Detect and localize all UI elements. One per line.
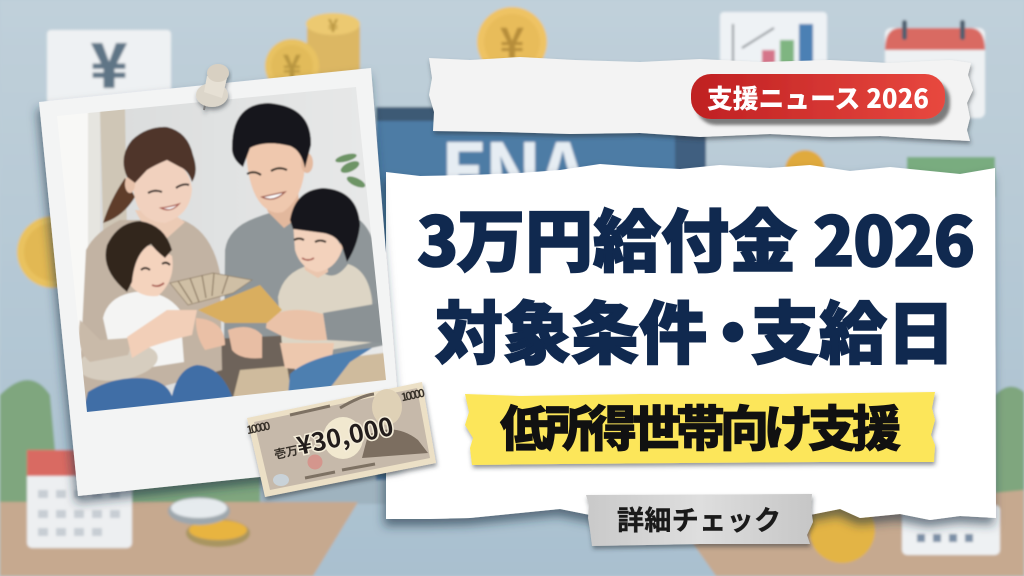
note labels: 10000: [400, 385, 426, 405]
monitor: [376, 107, 706, 480]
room: [100, 87, 383, 396]
cash fan: [170, 273, 252, 305]
envelope: [198, 285, 282, 323]
title: 2026: [813, 187, 975, 286]
coin stack and coins: ¥: [500, 10, 525, 71]
note labels: ¥30,000: [293, 407, 396, 463]
watermark oval: [273, 474, 289, 486]
woman: [78, 127, 222, 410]
torn strip: [429, 57, 973, 141]
grey shelf strip: [260, 478, 386, 504]
title: 3: [417, 187, 458, 286]
woman's arm and hands: [79, 310, 225, 362]
sofa shadow: [215, 335, 296, 396]
torn paper strip with news badge: [429, 57, 973, 141]
boy: [278, 188, 374, 396]
paper sheet: [386, 164, 996, 520]
man's other hand: [228, 327, 262, 358]
portrait: [323, 389, 428, 459]
monitor: ENA: [440, 111, 589, 223]
green banknote card: [907, 157, 995, 197]
girl: [76, 221, 232, 416]
badge: 支援ニュース 2026: 支援ニュース 2026: [707, 79, 929, 116]
polaroid family photo: [39, 64, 403, 496]
note labels: [245, 385, 434, 472]
title: 対象条件: [435, 279, 707, 378]
man's pants: [233, 352, 392, 398]
grey tag: 詳細チェック: [586, 494, 813, 546]
desk surfaces: [0, 490, 1024, 576]
green bushes: [0, 380, 1024, 505]
banknote ¥30,000: [245, 382, 436, 497]
grey tag: 詳細チェック: 詳細チェック: [617, 499, 781, 538]
yellow tape subtitle: 低所得世帯向け支援: [500, 390, 901, 461]
title: ・: [699, 279, 767, 378]
ornaments: [290, 394, 375, 478]
plant: [334, 152, 367, 190]
note labels: 壱万: [273, 441, 300, 463]
note body: [247, 382, 436, 497]
coin stack and coins: ¥: [328, 12, 339, 38]
man: [224, 103, 385, 380]
title: 万円給付金: [457, 187, 797, 286]
title: 支給日: [751, 279, 955, 378]
chart card: [720, 12, 827, 82]
main torn paper panel: [386, 164, 996, 546]
calendar bottom right: [902, 505, 1000, 555]
note labels: 10000: [245, 418, 272, 438]
calendar top right: [885, 20, 985, 118]
pushpin: [196, 64, 229, 110]
seal: [308, 454, 322, 470]
man's arm and hand: [266, 303, 384, 343]
yen card: [47, 16, 171, 110]
stacked silver and gold coins: [168, 497, 250, 547]
photo: [78, 87, 386, 412]
calendar bottom left: [27, 450, 132, 548]
coin stack and coins: ¥: [283, 42, 302, 88]
polaroid frame: [39, 68, 403, 496]
yen card: ¥: [90, 16, 128, 106]
title: [417, 187, 975, 378]
